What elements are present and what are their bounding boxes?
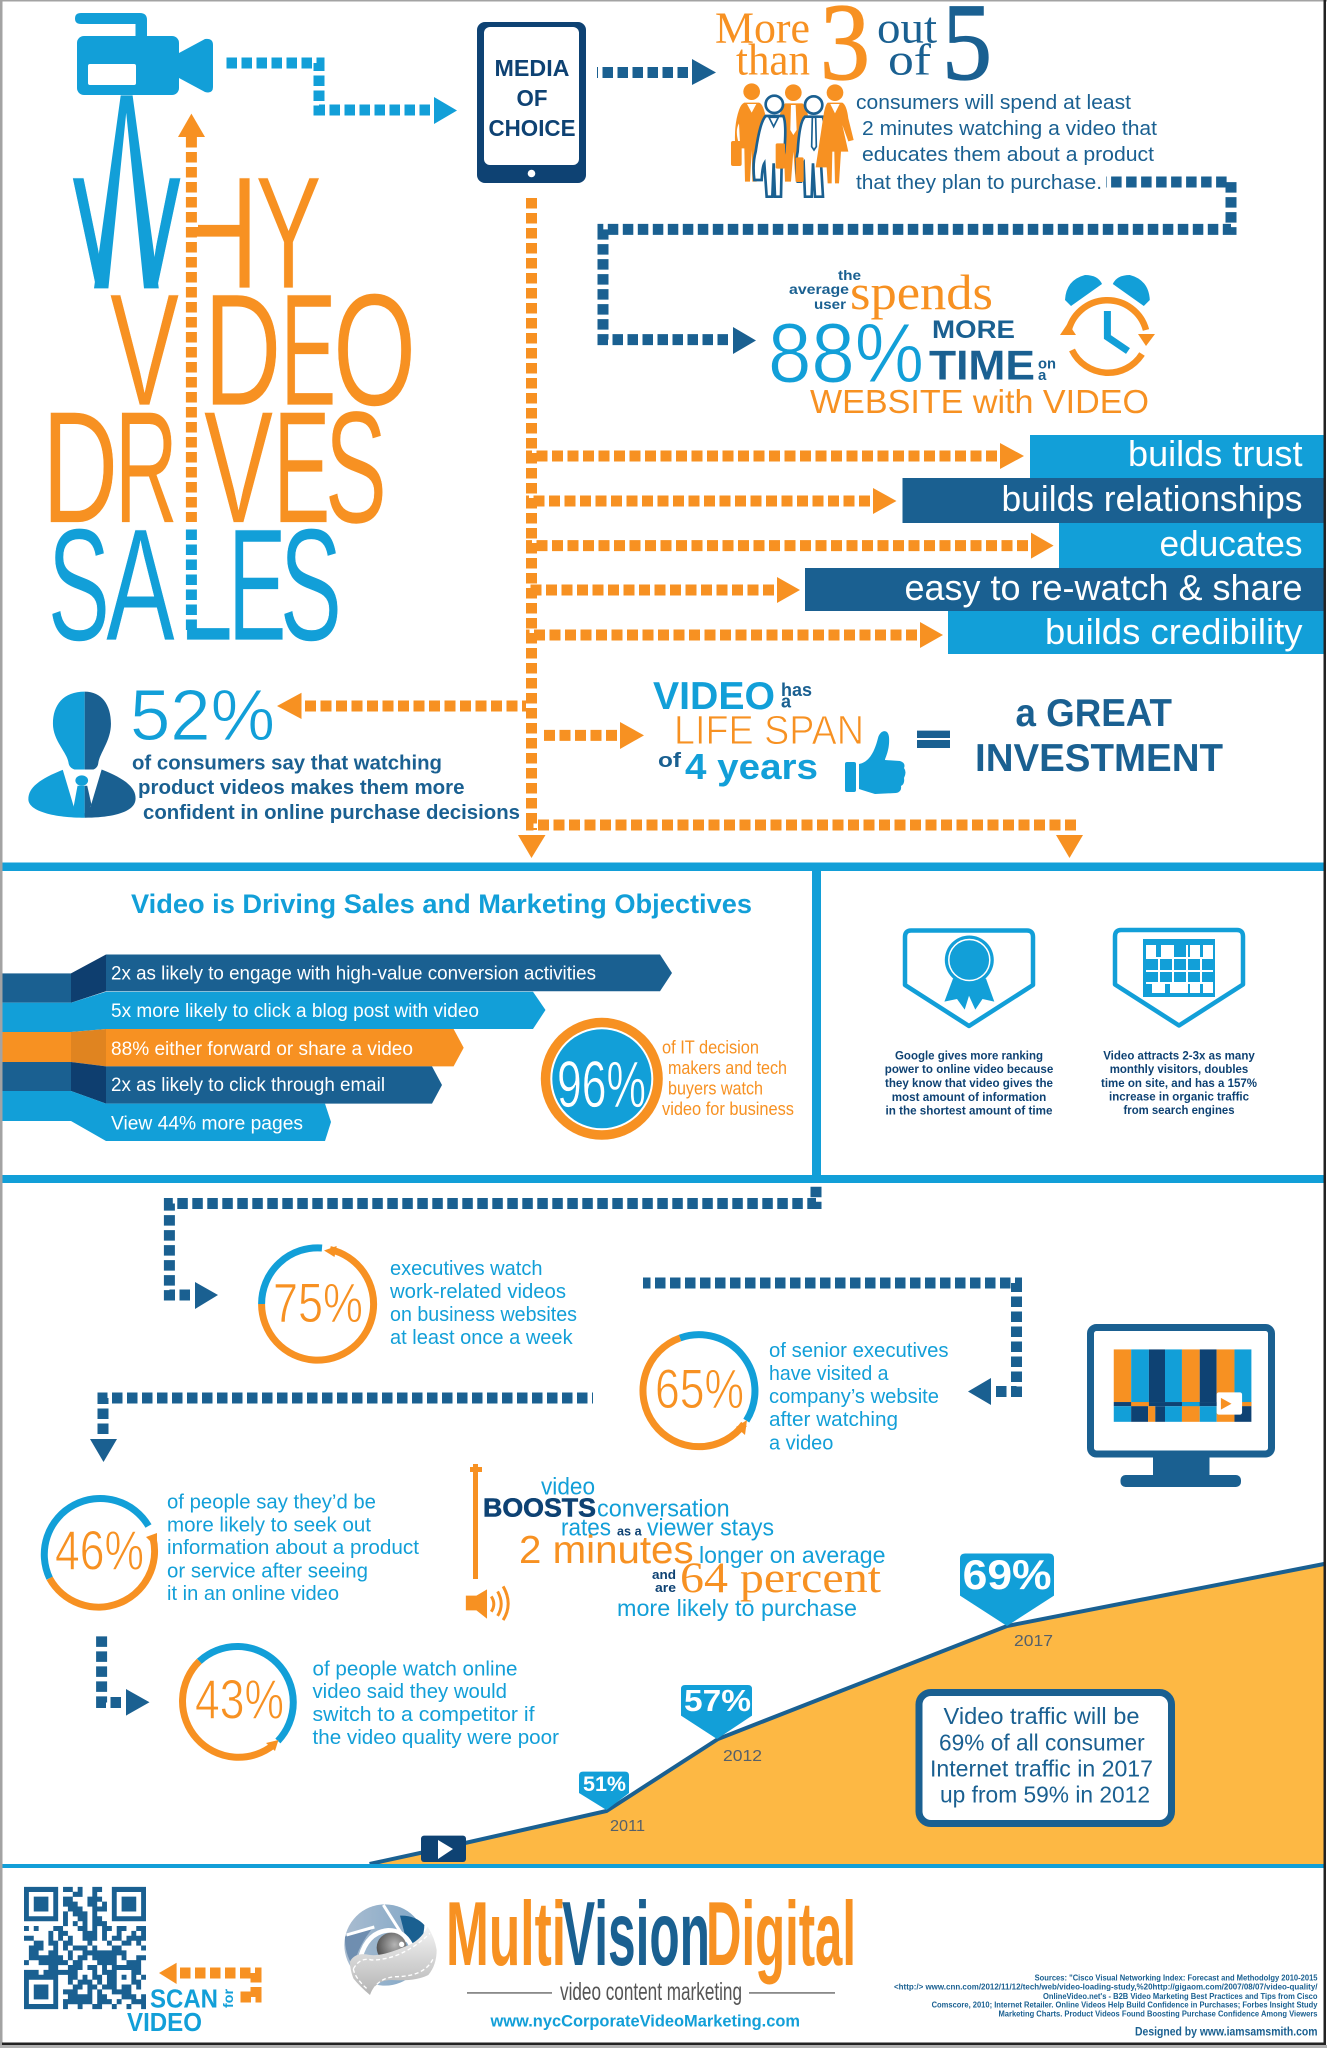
statistic: video life span: has xyxy=(781,680,812,700)
text: switch to competitor: of people watch online xyxy=(312,1658,518,1681)
text: IT decision makers: buyers watch xyxy=(668,1079,763,1099)
text: video boosts conversation rates: longer on average xyxy=(699,1542,886,1568)
statistic: 52 percent: product videos makes them more xyxy=(138,777,464,799)
title line: VIDEO: D xyxy=(204,260,282,439)
text: sources: Sources: "Cisco Visual Networking Index: Forecast and Methodolgy 2010-2015 xyxy=(1035,1974,1318,1983)
icon: ribbon award badge xyxy=(905,930,1033,1026)
ribbon: click through email xyxy=(2,1062,442,1104)
statistic: 88 percent more time: a xyxy=(1038,367,1047,384)
callout: 69 percent: 69% xyxy=(963,1551,1052,1598)
bar: builds relationships xyxy=(902,478,1324,523)
callout: 51 percent: 51% xyxy=(583,1773,626,1796)
title: why video drives sales xyxy=(42,95,416,675)
text: executives watch: at least once a week xyxy=(390,1326,573,1349)
text: seek out information: or service after seeing xyxy=(167,1560,368,1582)
orange figures back xyxy=(731,83,809,182)
title line: VIDEO xyxy=(110,260,416,440)
text: seek out information: of people say they’d be xyxy=(167,1490,376,1514)
text: video boosts conversation rates: as a xyxy=(617,1524,642,1538)
text: IT decision makers: makers and tech xyxy=(668,1058,787,1078)
statistic: 88 percent more time: spends xyxy=(850,264,993,320)
text: video attracts visitors: time on site, and has a 157% xyxy=(1101,1076,1257,1090)
text: senior executives: have visited a xyxy=(769,1362,889,1385)
ribbon: blog post: 5x more likely to click a blog post with video xyxy=(111,1001,479,1022)
arrow: main orange trunk xyxy=(518,198,546,858)
arrow: to right panel xyxy=(526,825,1083,858)
text: seek out information: more likely to seek out xyxy=(167,1514,371,1537)
text: google ranking: they know that video gives the xyxy=(885,1076,1053,1090)
title line: SALES xyxy=(48,495,342,675)
statistic: video life span: VIDEO xyxy=(653,675,775,718)
text: video boosts conversation rates: BOOSTS xyxy=(483,1492,596,1522)
link: website url: www.nycCorporateVideoMarketing.com xyxy=(490,2013,800,2031)
title line: SALES: L xyxy=(179,496,233,675)
statistic: 88 percent more time: 88% xyxy=(768,306,924,400)
statistic: video life span: 4 years xyxy=(685,746,818,787)
benefit bars xyxy=(805,433,1324,654)
arrow: to 75 percent xyxy=(169,1183,816,1309)
title line: DRIVES: E xyxy=(273,379,330,557)
text: senior executives xyxy=(769,1339,949,1455)
title line: DRIVES: V xyxy=(204,378,273,557)
text: google ranking: in the shortest amount of time xyxy=(886,1104,1053,1118)
arrow: to 46 percent xyxy=(90,1398,593,1462)
bar: builds trust xyxy=(1030,433,1324,478)
arrow: to 65 percent xyxy=(643,1283,1016,1405)
text: seek out information xyxy=(167,1490,419,1605)
year labels xyxy=(610,1633,1053,1835)
ribbon: conversion activities: 2x as likely to engage with high-value conversion activities xyxy=(111,964,596,985)
statistic: 52 percent xyxy=(130,676,520,824)
title line: WHY: Y xyxy=(256,145,322,323)
ribbon: more pages: View 44% more pages xyxy=(111,1113,303,1134)
icon: equals sign xyxy=(917,731,950,748)
text: video boosts conversation rates: more likely to purchase xyxy=(617,1595,857,1621)
text: executives watch: work-related videos xyxy=(389,1280,566,1303)
ribbon: more pages xyxy=(2,1091,331,1141)
statistic: 52 percent: of consumers say that watching xyxy=(132,752,442,774)
year labels: 2017 xyxy=(1014,1633,1053,1650)
text: video boosts conversation rates: conversation xyxy=(597,1496,730,1522)
logo text: MultiVisionDigital: Vision xyxy=(562,1884,710,1985)
text: senior executives: a video xyxy=(769,1432,833,1455)
statistic: 65 percent ring: 65% xyxy=(655,1357,744,1420)
text: executives watch: on business websites xyxy=(390,1303,577,1326)
icon: tablet media of choice: OF xyxy=(516,85,548,111)
text: executives watch: executives watch xyxy=(390,1257,542,1280)
icon: tablet media of choice xyxy=(477,22,586,183)
text: video boosts conversation rates: 64 percent xyxy=(680,1555,881,1602)
text: consumers watching xyxy=(856,91,1157,194)
text: scan for video: for xyxy=(220,1988,236,2008)
statistic: 75 percent ring: 75% xyxy=(273,1271,363,1334)
bar: educates xyxy=(1059,523,1324,568)
heading: video is driving sales: Video is Driving Sales and Marketing Objectives xyxy=(131,889,752,919)
title line: DRIVES xyxy=(42,377,387,557)
text: senior executives: after watching xyxy=(769,1408,898,1431)
callout: traffic forecast: up from 59% in 2012 xyxy=(940,1782,1150,1808)
icon: calendar badge xyxy=(1115,930,1243,1026)
icon: thumbs up xyxy=(845,731,906,794)
text: video attracts visitors: increase in organic traffic xyxy=(1109,1090,1249,1104)
logo text: MultiVisionDigital: Multi xyxy=(446,1884,566,1985)
text: sources xyxy=(894,1974,1318,2019)
text: IT decision makers xyxy=(662,1038,794,1119)
arrow: to life span xyxy=(542,722,644,749)
arrow: upward dashes through title xyxy=(178,114,205,630)
text: video boosts conversation rates: rates xyxy=(561,1514,611,1542)
bar: builds credibility: builds credibility xyxy=(1045,611,1302,652)
text: switch to competitor: video said they would xyxy=(312,1680,507,1703)
bar: builds credibility xyxy=(948,611,1324,654)
statistic: 88 percent more time: on xyxy=(1038,356,1056,373)
icon: desktop monitor xyxy=(1090,1328,1272,1487)
statistic: video life span: of xyxy=(658,750,681,772)
text: google ranking xyxy=(885,1048,1054,1118)
arrows: benefits branches xyxy=(526,443,1054,648)
icon: video camera xyxy=(75,13,213,95)
statistic: video life span xyxy=(653,675,864,787)
arrow: tablet to statistic xyxy=(597,59,716,85)
ribbon: blog post xyxy=(2,992,546,1032)
text: seek out information: information about a product xyxy=(167,1536,419,1559)
callout: traffic forecast xyxy=(919,1692,1172,1824)
text: scan for video: SCAN xyxy=(150,1984,218,2014)
title line: SALES: S xyxy=(280,495,342,674)
icon: tablet media of choice: CHOICE xyxy=(488,115,576,141)
ribbon: forward or share xyxy=(2,1029,464,1066)
heading: more than 3 out of 5: out xyxy=(877,4,937,52)
statistic: 46 percent ring xyxy=(44,1498,157,1607)
callout: 69 percent xyxy=(960,1551,1054,1626)
title line: VIDEO: O xyxy=(333,260,416,439)
title line: SALES: A xyxy=(106,495,175,674)
text: consumers watching: 2 minutes watching a video that xyxy=(862,117,1157,140)
text: video attracts visitors: from search engines xyxy=(1124,1103,1235,1117)
text: switch to competitor: switch to a competitor if xyxy=(312,1703,535,1726)
text: video boosts conversation rates: 2 minutes xyxy=(519,1529,694,1572)
text: a great investment: a GREAT xyxy=(1016,692,1172,735)
year labels: 2011 xyxy=(610,1818,645,1835)
icon: group of consumers xyxy=(731,83,854,197)
icon: volume slider and speaker xyxy=(466,1464,508,1620)
text: senior executives: company’s website xyxy=(769,1385,939,1408)
statistic: 75 percent ring xyxy=(262,1246,374,1360)
statistic: 88 percent more time: MORE xyxy=(932,316,1015,344)
heading: more than 3 out of 5 xyxy=(715,0,992,103)
text: sources: Marketing Charts. Product Videos Found Boosting Purchase Confidence Among Viewers xyxy=(998,2010,1318,2019)
icon: play button xyxy=(421,1836,466,1862)
statistic: 88 percent more time: WEBSITE with VIDEO xyxy=(810,383,1149,420)
icon: alarm clock xyxy=(1060,275,1155,373)
heading: more than 3 out of 5: than xyxy=(736,36,810,85)
icon: QR code xyxy=(24,1889,146,2007)
heading: more than 3 out of 5: of xyxy=(888,36,931,85)
text: seek out information: it in an online video xyxy=(167,1582,339,1605)
text: a great investment: INVESTMENT xyxy=(975,737,1223,780)
text: video boosts conversation rates: video xyxy=(541,1474,595,1501)
callout: traffic forecast: Video traffic will be xyxy=(944,1703,1140,1729)
statistic: 88 percent more time: the xyxy=(838,267,861,283)
arrow: to 52 percent xyxy=(277,693,526,719)
text: consumers watching: that they plan to purchase. xyxy=(856,171,1102,194)
icon: tablet media of choice: MEDIA xyxy=(494,55,570,81)
text: sources: OnlineVideo.net's - B2B Video Marketing Best Practices and Tips from Cisco xyxy=(1043,1992,1318,2001)
title line: VIDEO: E xyxy=(280,261,336,440)
text: scan for video xyxy=(127,1984,236,2037)
year labels: 2012 xyxy=(723,1748,762,1765)
text: sources: <http:/> www.cnn.com/2012/11/12/tech/web/video-loading-study,%20http://gigaom.com/2007/08/07/video-quality/ xyxy=(894,1982,1318,1992)
text: IT decision makers: video for business xyxy=(662,1099,794,1119)
text: video attracts visitors: monthly visitors, doubles xyxy=(1110,1062,1249,1076)
icon: business person xyxy=(28,692,136,818)
text: IT decision makers: of IT decision xyxy=(662,1038,759,1058)
title line: WHY: W xyxy=(72,144,181,322)
title line: DRIVES: R xyxy=(114,379,178,557)
arrow: to 43 percent xyxy=(102,1635,150,1716)
text: google ranking: Google gives more ranking xyxy=(895,1048,1043,1062)
ribbon: forward or share: 88% either forward or share a video xyxy=(111,1039,413,1060)
title line: WHY: H xyxy=(177,144,259,323)
title line: DRIVES: S xyxy=(325,377,387,557)
callout: 57 percent: 57% xyxy=(684,1683,751,1718)
arrow: scan for video xyxy=(159,1963,256,1997)
text: video boosts conversation rates: are xyxy=(655,1580,676,1595)
text: consumers watching: educates them about a product xyxy=(862,143,1154,166)
callout: traffic forecast: Internet traffic in 2017 xyxy=(930,1756,1153,1782)
title line: VIDEO: V xyxy=(110,260,179,439)
text: video attracts visitors: Video attracts 2-3x as many xyxy=(1103,1048,1255,1062)
logo text: MultiVisionDigital: Digital xyxy=(706,1884,856,1985)
ribbon: click through email: 2x as likely to click through email xyxy=(111,1075,385,1096)
outline figure left xyxy=(754,96,785,197)
text: video boosts conversation rates: viewer stays xyxy=(647,1514,774,1542)
statistic: video life span: a xyxy=(781,692,792,712)
ribbon: conversion activities xyxy=(2,954,672,1003)
bar: educates: educates xyxy=(1160,523,1302,564)
ribbon chart: objectives xyxy=(2,954,672,1141)
statistic: 96 percent badge xyxy=(541,1018,663,1140)
statistic: 43 percent ring xyxy=(183,1646,293,1757)
text: a great investment xyxy=(975,692,1223,780)
orange figures front xyxy=(776,84,854,183)
arrow: statistic to 88 percent xyxy=(603,182,1231,354)
text: switch to competitor xyxy=(312,1658,559,1749)
callout: 51 percent xyxy=(579,1772,629,1810)
text: video boosts conversation rates xyxy=(483,1474,886,1621)
statistic: 52 percent: 52% xyxy=(130,676,275,756)
text: google ranking: power to online video because xyxy=(885,1062,1054,1076)
title line: SALES: E xyxy=(228,496,286,675)
text: senior executives: of senior executives xyxy=(769,1339,949,1362)
statistic: 96 percent badge: 96% xyxy=(557,1047,646,1121)
statistic: 46 percent ring: 46% xyxy=(55,1519,144,1582)
arrow: camera to media of choice xyxy=(225,63,457,124)
statistic: video life span: LIFE SPAN xyxy=(674,707,864,753)
statistic: 88 percent more time: TIME xyxy=(929,342,1035,388)
bar: easy to re-watch and share: easy to re-watch & share xyxy=(904,567,1302,608)
statistic: 43 percent ring: 43% xyxy=(195,1668,284,1730)
callout: traffic forecast: 69% of all consumer xyxy=(939,1730,1145,1756)
tagline: video content marketing: video content marketing xyxy=(560,1978,742,2006)
title line: WHY xyxy=(72,95,322,323)
bar: builds relationships: builds relationships xyxy=(1002,478,1302,519)
title line: SALES: S xyxy=(48,495,110,674)
text: executives watch xyxy=(389,1257,577,1349)
bar: builds trust: builds trust xyxy=(1128,433,1302,474)
text: video boosts conversation rates: and xyxy=(652,1567,676,1582)
text: switch to competitor: the video quality were poor xyxy=(312,1726,559,1749)
logo text: MultiVisionDigital xyxy=(446,1884,856,1985)
heading: more than 3 out of 5: More xyxy=(715,4,810,52)
statistic: 88 percent more time xyxy=(768,264,1149,420)
area chart: video traffic xyxy=(370,1551,1324,1864)
text: google ranking: most amount of information xyxy=(892,1090,1046,1104)
statistic: 65 percent ring xyxy=(643,1335,755,1447)
statistic: 88 percent more time: average xyxy=(789,281,849,297)
statistic: 88 percent more time: user xyxy=(814,296,847,312)
outline figure right xyxy=(796,96,825,197)
text: consumers watching: consumers will spend at least xyxy=(856,91,1131,114)
title line: DRIVES: D xyxy=(42,378,118,557)
text: video attracts visitors xyxy=(1101,1048,1257,1117)
panel frame: objectives xyxy=(2,862,1324,1183)
logo: aperture and film strip xyxy=(344,1904,437,1995)
divider: footer rule xyxy=(2,1864,1324,1868)
callout: 57 percent xyxy=(681,1683,752,1739)
statistic: 52 percent: confident in online purchase decisions xyxy=(143,802,520,824)
text: scan for video: VIDEO xyxy=(127,2007,202,2037)
